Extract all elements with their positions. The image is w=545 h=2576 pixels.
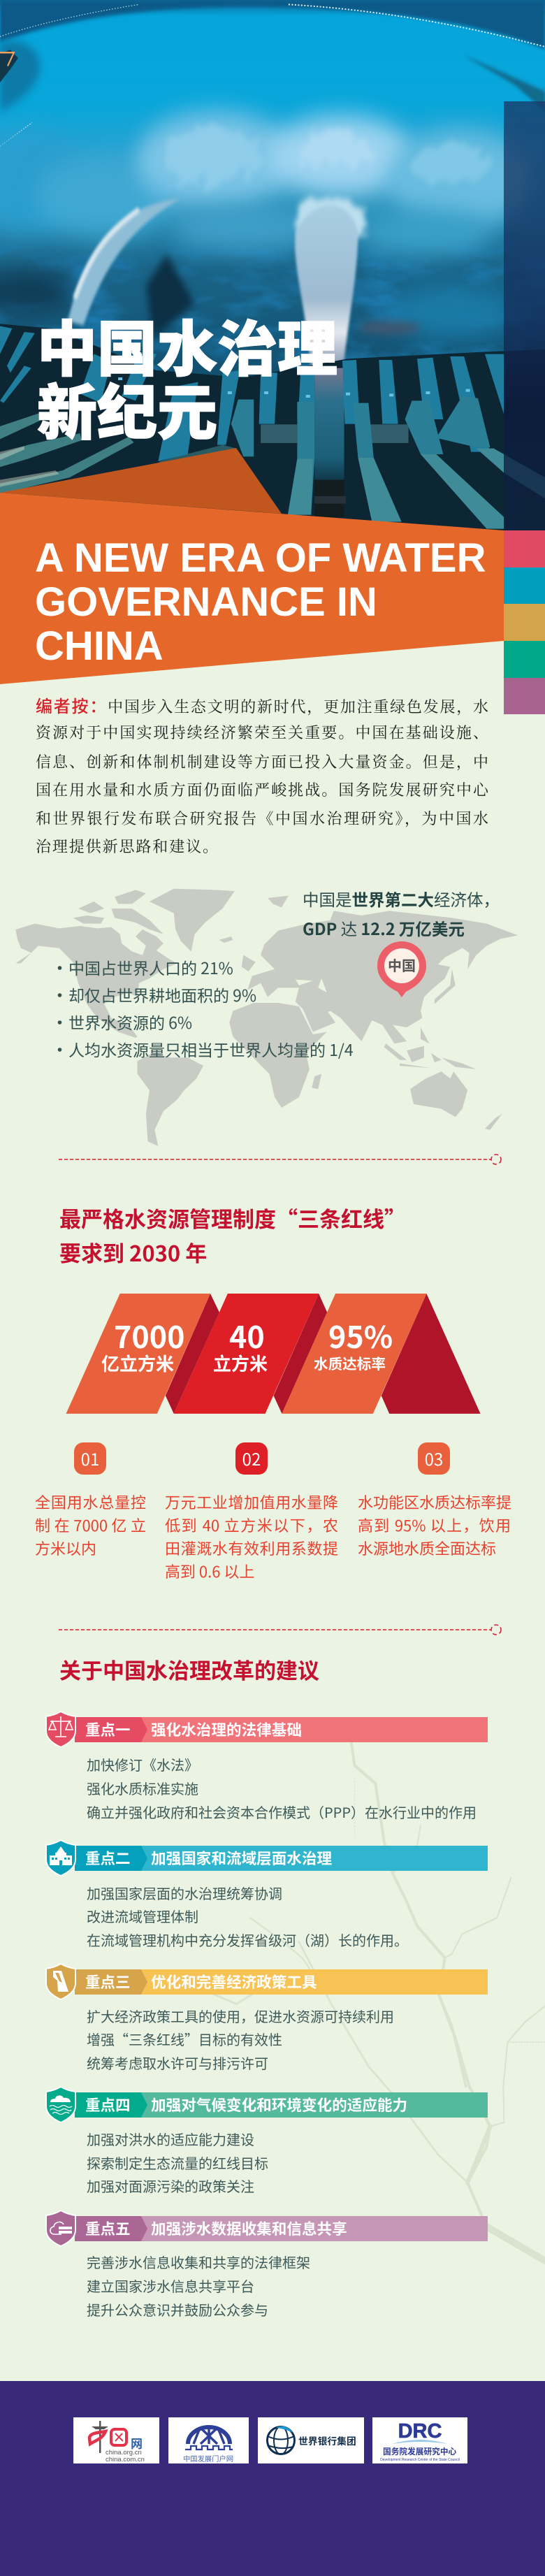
row 1: legal basis: 强化水质标准实施 [87, 1778, 198, 1798]
ribbon chart: three targets [66, 1294, 481, 1414]
title: Chinese: 新纪元 [37, 364, 217, 451]
title: English: CHINA [35, 623, 164, 669]
orange banner and side colour strip [0, 448, 545, 714]
mist clouds [0, 133, 87, 232]
header bar 2 [45, 1839, 488, 1876]
target text 01: 制 在 7000 亿 立 [35, 1514, 146, 1536]
row 5: data and information sharing: 提升公众意识并鼓励公众参与 [87, 2299, 268, 2320]
target text 01: 方米以内 [35, 1537, 96, 1559]
header bar 4: 重点四 [85, 2094, 131, 2115]
lower pillars [231, 396, 490, 515]
title: English: GOVERNANCE IN [35, 579, 377, 625]
logo: china.org.cn: china.com.cn [106, 2456, 145, 2463]
target text 02: 高到 0.6 以上 [165, 1560, 254, 1582]
badge 01: 01 [81, 1446, 99, 1470]
horizontal beams [261, 424, 297, 443]
row 5: data and information sharing: 建立国家涉水信息共享平台 [87, 2275, 254, 2296]
dashed divider [59, 1154, 502, 1165]
target text 02: 万元工业增加值用水量降 [165, 1491, 338, 1513]
row 4: climate adaptation [45, 2086, 488, 2196]
row 2: national and basin governance: 在流域管理机构中充分发挥省级河（湖）长的作用。 [87, 1930, 408, 1950]
logo: DRC: DRC [398, 2420, 442, 2443]
small markers [118, 377, 470, 398]
bullet list: water facts: 人均水资源量只相当于世界人均量的 1/4 [68, 1037, 354, 1061]
bullet list: water facts: 中国占世界人口的 21% [68, 955, 233, 979]
heading: three red lines: 要求到 2030 年 [59, 1236, 207, 1268]
title: Chinese: 中国水治理 [37, 301, 337, 388]
map pin: China [377, 941, 426, 997]
target text 01 [35, 1491, 146, 1559]
hero photo: dam spillway [0, 0, 545, 530]
dam base [0, 324, 545, 550]
row 2: national and basin governance: 改进流域管理体制 [87, 1906, 198, 1926]
target text 02 [165, 1491, 338, 1582]
row 5: data and information sharing [45, 2210, 488, 2320]
header bar 1: 重点一 [85, 1718, 131, 1740]
editor's note paragraph: 资源对于中国实现持续经济繁荣至关重要。中国在基础设施、 [36, 724, 488, 741]
stat: second largest economy [303, 887, 500, 940]
header bar 1 [45, 1711, 488, 1748]
logo: World Bank Group: 世界银行集团 [298, 2436, 356, 2447]
row 3: economic policy tools: 增强“三条红线”目标的有效性 [87, 2029, 282, 2049]
row 5: data and information sharing: 完善涉水信息收集和共享的法律框架 [87, 2252, 310, 2272]
logo: DRC: Development Research Center of the State Council [380, 2458, 460, 2462]
header bar 3 [45, 1963, 488, 2000]
world map [15, 889, 518, 1146]
stat: second largest economy: GDP 达 12.2 万亿美元 [303, 916, 465, 940]
ribbon label: 40 [213, 1314, 268, 1376]
row 4: climate adaptation: 探索制定生态流量的红线目标 [87, 2152, 268, 2173]
editor's note paragraph [36, 693, 488, 855]
target text 03: 高到 95% 以上，饮用 [358, 1514, 511, 1536]
ribbon label: 40: 40 [229, 1314, 265, 1357]
badge 03 [418, 1442, 450, 1475]
header bar 5: 加强涉水数据收集和信息共享 [151, 2217, 347, 2239]
dashed divider [59, 1624, 502, 1635]
row 4: climate adaptation: 加强对洪水的适应能力建设 [87, 2129, 254, 2149]
target text 02: 低到 40 立方米以下，农 [165, 1514, 338, 1536]
logo: china.org.cn [73, 2417, 159, 2463]
ribbon label: 95%: 水质达标率 [314, 1352, 386, 1373]
logo: China development gateway [168, 2417, 249, 2463]
footer band [0, 2381, 545, 2576]
stat: second largest economy: 中国是世界第二大经济体， [303, 887, 500, 911]
editor's note paragraph: 和世界银行发布联合研究报告《中国水治理研究》，为中国水 [36, 810, 488, 827]
left sloped bands [0, 412, 236, 494]
row 2: national and basin governance: 加强国家层面的水治理统筹协调 [87, 1883, 282, 1903]
target text 01: 全国用水总量控 [35, 1491, 146, 1513]
ribbon label: 95% [314, 1314, 393, 1373]
badge 01 [74, 1442, 106, 1475]
bullet list: water facts: 却仅占世界耕地面积的 9% [68, 983, 256, 1006]
logo: DRC: 国务院发展研究中心 [383, 2447, 457, 2456]
chute [314, 368, 344, 480]
editor's note paragraph: 国在用水量和水质方面仍面临严峻挑战。国务院发展研究中心 [36, 781, 488, 799]
target text 03: 水源地水质全面达标 [358, 1537, 496, 1559]
logo: china.org.cn: china.org.cn [106, 2449, 142, 2456]
ribbon label: 7000: 亿立方米 [101, 1350, 174, 1376]
ribbon label: 7000: 7000 [114, 1314, 184, 1357]
heading: three red lines [59, 1202, 406, 1268]
heading: recommendations: 关于中国水治理改革的建议 [59, 1654, 319, 1685]
central spout [295, 205, 358, 375]
row 3: economic policy tools: 统筹考虑取水许可与排污许可 [87, 2053, 268, 2073]
badge 03: 03 [425, 1446, 443, 1470]
badge 02: 02 [242, 1446, 261, 1470]
badge 02 [235, 1442, 268, 1475]
row 4: climate adaptation: 加强对面源污染的政策关注 [87, 2176, 254, 2196]
map pin: China: 中国 [388, 955, 416, 975]
row 2: national and basin governance [45, 1839, 488, 1950]
editor's note paragraph: 信息、创新和体制机制建设等方面已投入大量资金。但是，中 [36, 753, 488, 771]
header bar 5 [45, 2210, 488, 2247]
logo: china.org.cn: 网 [131, 2438, 143, 2451]
row 3: economic policy tools [45, 1963, 488, 2073]
target text 03 [358, 1491, 511, 1559]
header bar 1: 强化水治理的法律基础 [151, 1718, 302, 1740]
title: English [35, 535, 486, 669]
row 1: legal basis [45, 1711, 488, 1822]
target text 02: 田灌溉水有效利用系数提 [165, 1537, 338, 1559]
header bar 4: 加强对气候变化和环境变化的适应能力 [151, 2094, 407, 2115]
logo: World Bank Group [258, 2417, 364, 2463]
header bar 4 [45, 2086, 488, 2123]
row 1: legal basis: 加快修订《水法》 [87, 1754, 198, 1774]
editor's note paragraph: 治理提供新思路和建议。 [36, 838, 219, 855]
ribbon label: 95%: 95% [328, 1314, 393, 1357]
top shade [0, 0, 545, 49]
editor's note paragraph: 编者按：中国步入生态文明的新时代，更加注重绿色发展，水 [36, 693, 488, 717]
bullet list: water facts [57, 955, 354, 1061]
dark water [0, 272, 76, 312]
title: English: A NEW ERA OF WATER [35, 535, 486, 581]
ribbon label: 40: 立方米 [213, 1350, 268, 1376]
header bar 3: 优化和完善经济政策工具 [151, 1971, 317, 1992]
logo: DRC [372, 2417, 467, 2463]
header bar 3: 重点三 [85, 1971, 131, 1992]
row 3: economic policy tools: 扩大经济政策工具的使用，促进水资源可持续利用 [87, 2006, 394, 2026]
target text 03: 水功能区水质达标率提 [358, 1491, 511, 1513]
row 1: legal basis: 确立并强化政府和社会资本合作模式（PPP）在水行业中的作用 [87, 1802, 477, 1822]
heading: three red lines: 最严格水资源管理制度“三条红线” [59, 1202, 406, 1233]
logo: China development gateway: 中国发展门户网 [183, 2454, 233, 2463]
header bar 2: 重点二 [85, 1847, 131, 1869]
title: Chinese [37, 301, 337, 451]
bullet list: water facts: 世界水资源的 6% [68, 1010, 192, 1034]
header bar 2: 加强国家和流域层面水治理 [151, 1847, 333, 1869]
upper pillars [0, 326, 504, 461]
header bar 5: 重点五 [85, 2217, 131, 2239]
ribbon label: 7000 [101, 1314, 184, 1376]
left spout arc [68, 198, 181, 326]
